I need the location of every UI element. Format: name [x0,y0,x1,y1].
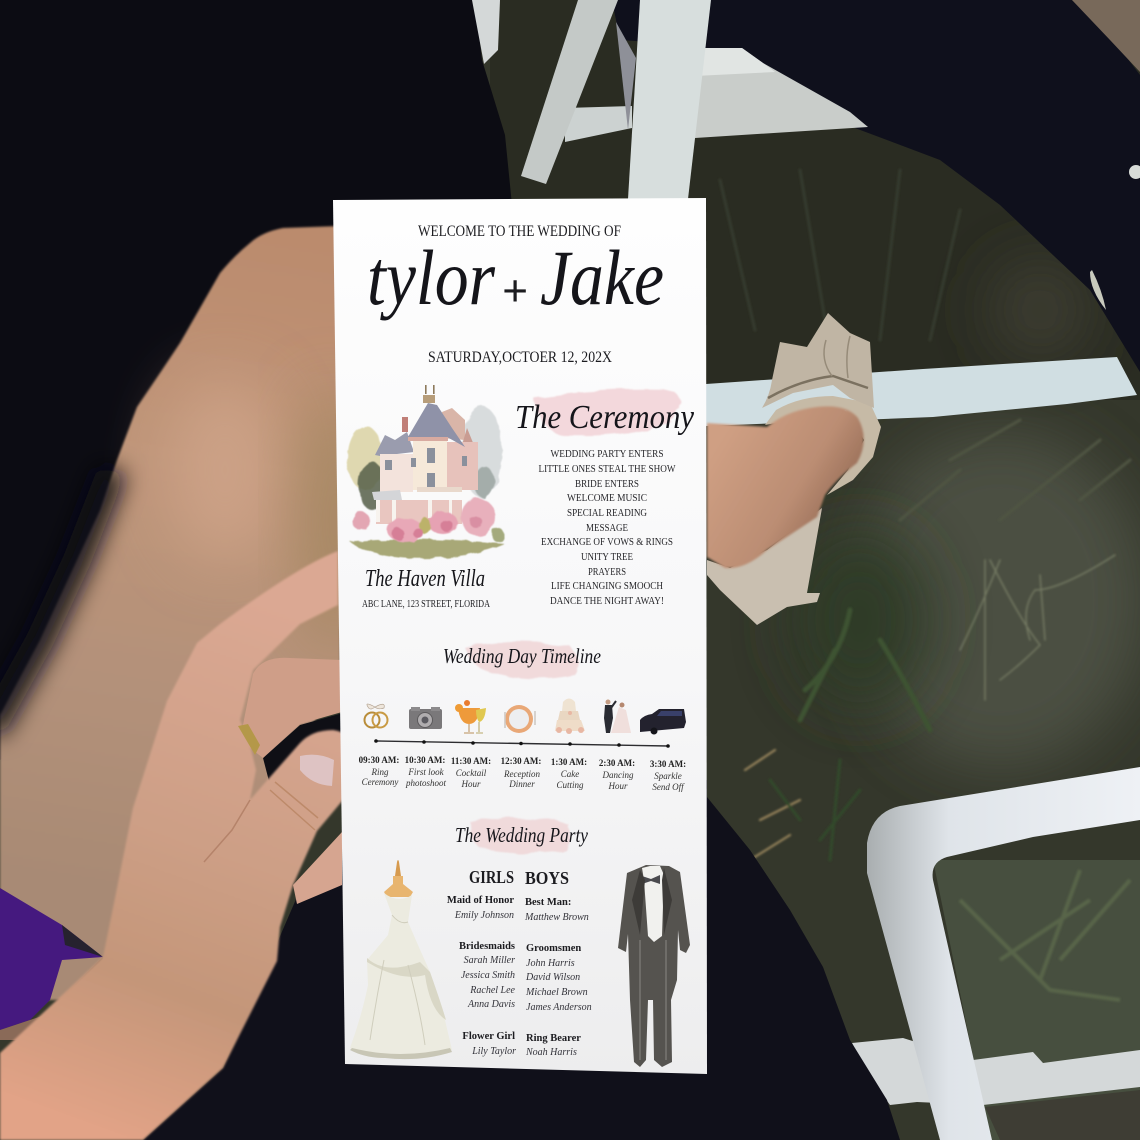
couple names script [367,234,664,321]
shoe and foot [707,313,881,625]
entry: dancing hour: Dancing [602,770,634,780]
icon: wedding cake [555,698,585,734]
entry: reception dinner: 12:30 AM: [501,756,541,766]
ceremony order list: DANCE THE NIGHT AWAY! [550,596,664,607]
entry: cake cutting [551,757,587,790]
venue address: ABC LANE, 123 STREET, FLORIDA [362,599,490,610]
hand holding the card [0,551,358,1140]
girls roster: Sarah Miller [464,955,515,966]
party brush swash [470,817,569,853]
column heading: boys: BOYS [525,868,569,888]
entry: ring ceremony [359,755,399,787]
boys roster: Ring Bearer [526,1033,581,1044]
couple names script: tylor [367,234,496,321]
ceremony order list: PRAYERS [588,567,626,578]
ceremony order list: WELCOME MUSIC [567,493,647,504]
white folding chair, upper [472,0,868,199]
girls roster: Flower Girl [462,1031,515,1042]
entry: cocktail hour: Hour [460,779,481,789]
entry: reception dinner: Dinner [508,779,535,789]
illustration: wedding dress [350,860,452,1059]
boys roster: Matthew Brown [524,912,589,923]
icon: camera [409,707,442,729]
entry: cocktail hour [451,756,491,789]
photo background: dark clothing upper left [0,0,512,760]
girls roster: Jessica Smith [461,970,515,981]
icon: dancing couple [604,700,631,733]
icon: cocktails [455,700,486,733]
card sheet [333,198,707,1074]
ceremony order list: LIFE CHANGING SMOOCH [551,581,663,592]
entry: sparkle send off [650,759,686,792]
entry: sparkle send off: Sparkle [654,771,682,781]
entry: sparkle send off: 3:30 AM: [650,759,686,769]
girls roster: Bridesmaids [459,941,515,952]
ceremony brush swash [533,390,679,436]
entry: first look: 10:30 AM: [405,755,445,765]
entry: reception dinner: Reception [503,769,540,779]
boys roster: James Anderson [526,1002,592,1013]
ceremony order list: BRIDE ENTERS [575,479,639,490]
dark skirt, lower [143,780,900,1140]
ceremony order list: SPECIAL READING [567,508,647,519]
boys roster: Groomsmen [526,943,581,954]
boys roster: David Wilson [525,972,580,983]
illustration: villa [347,385,505,558]
entry: dancing hour [599,758,635,791]
white chair rail behind shoe [706,357,1137,426]
entry: ring ceremony: Ceremony [362,777,398,787]
entry: cocktail hour: 11:30 AM: [451,756,491,766]
column heading: girls: GIRLS [469,867,514,887]
venue name script: The Haven Villa [365,566,485,592]
couple names script: + [502,265,528,316]
girls roster: Rachel Lee [469,985,516,996]
icon: place setting [505,705,535,733]
boys roster [524,897,592,1058]
girls roster: Maid of Honor [447,895,514,906]
heading: welcome: WELCOME TO THE WEDDING OF [418,223,621,240]
entry: cake cutting: 1:30 AM: [551,757,587,767]
entry: cake cutting: Cutting [556,780,584,790]
illustration: tuxedo [618,865,690,1067]
entry: first look [405,755,446,788]
icon: wedding rings [364,704,388,728]
girls roster [447,895,516,1057]
ceremony order list: LITTLE ONES STEAL THE SHOW [538,464,676,475]
timeline entries [359,755,686,792]
white chair, lower right [852,767,1140,1140]
event date: SATURDAY,OCTOER 12, 202X [428,349,612,366]
timeline brush swash [465,641,579,679]
girls roster: Anna Davis [467,999,515,1010]
photo background: navy trousers upper right [612,0,1140,372]
girls roster: Lily Taylor [471,1046,516,1057]
girls roster: Emily Johnson [454,910,514,921]
boys roster: John Harris [526,958,575,969]
ceremony order list: UNITY TREE [581,552,633,563]
entry: first look: First look [407,767,445,777]
boys roster: Best Man: [525,897,571,908]
boys roster: Noah Harris [525,1047,577,1058]
entry: cocktail hour: Cocktail [456,768,487,778]
entry: first look: photoshoot [405,778,446,788]
purple wrist band [0,888,105,1040]
printed card [333,198,707,1074]
ceremony order list: MESSAGE [586,523,628,534]
timeline script heading: Wedding Day Timeline [443,644,601,668]
ceremony script heading: The Ceremony [515,399,695,436]
ceremony order list: WEDDING PARTY ENTERS [550,449,664,460]
ceremony order list: EXCHANGE OF VOWS & RINGS [541,537,673,548]
couple names script: Jake [540,234,664,321]
party script heading: The Wedding Party [455,823,589,847]
entry: ring ceremony: 09:30 AM: [359,755,399,765]
entry: ring ceremony: Ring [370,767,389,777]
entry: reception dinner [501,756,541,789]
boys roster: Michael Brown [525,987,588,998]
entry: cake cutting: Cake [561,769,579,779]
thigh [0,226,370,1000]
ceremony order list [538,449,676,607]
entry: sparkle send off: Send Off [652,782,685,792]
timeline axis [374,739,670,748]
entry: dancing hour: 2:30 AM: [599,758,635,768]
entry: dancing hour: Hour [607,781,628,791]
icon: limousine [640,709,686,734]
